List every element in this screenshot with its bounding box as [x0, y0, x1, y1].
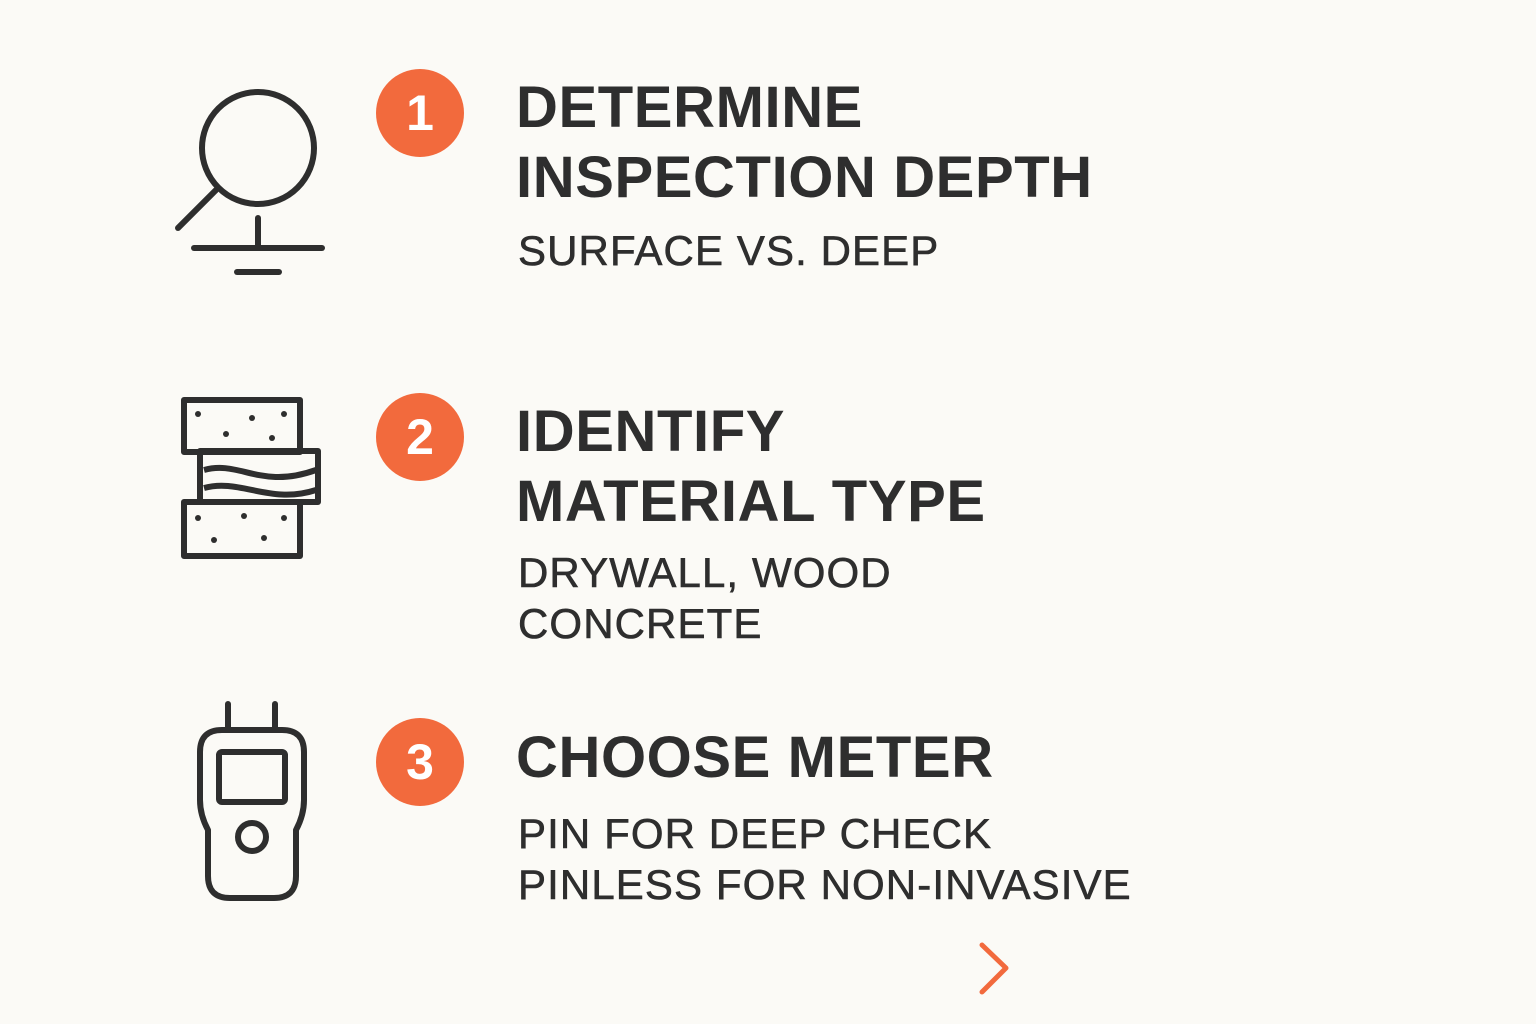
- number 2: [376, 393, 464, 481]
- subtitle 2: [518, 549, 892, 647]
- title 1: INSPECTION DEPTH: [516, 145, 1093, 210]
- icon: magnifier: [175, 89, 325, 275]
- title 3: CHOOSE METER: [516, 725, 994, 790]
- number 1: 1: [406, 85, 434, 141]
- title 2: [516, 399, 986, 534]
- number 3: 3: [406, 734, 434, 790]
- subtitle 3: [518, 810, 1132, 908]
- title 1: [516, 75, 1093, 210]
- number 2: 2: [406, 409, 434, 465]
- number 1: [376, 69, 464, 157]
- subtitle 3: PIN FOR DEEP CHECK: [518, 810, 992, 857]
- subtitle 2: CONCRETE: [518, 600, 762, 647]
- title 1: DETERMINE: [516, 75, 863, 140]
- title 2: IDENTIFY: [516, 399, 785, 464]
- arrow: next chevron: [980, 942, 1008, 994]
- icon: moisture meter: [197, 701, 307, 901]
- icon: material layers: [181, 397, 321, 559]
- subtitle 3: PINLESS FOR NON-INVASIVE: [518, 861, 1132, 908]
- subtitle 1: SURFACE VS. DEEP: [518, 227, 939, 274]
- subtitle 2: DRYWALL, WOOD: [518, 549, 892, 596]
- title 2: MATERIAL TYPE: [516, 469, 986, 534]
- number 3: [376, 718, 464, 806]
